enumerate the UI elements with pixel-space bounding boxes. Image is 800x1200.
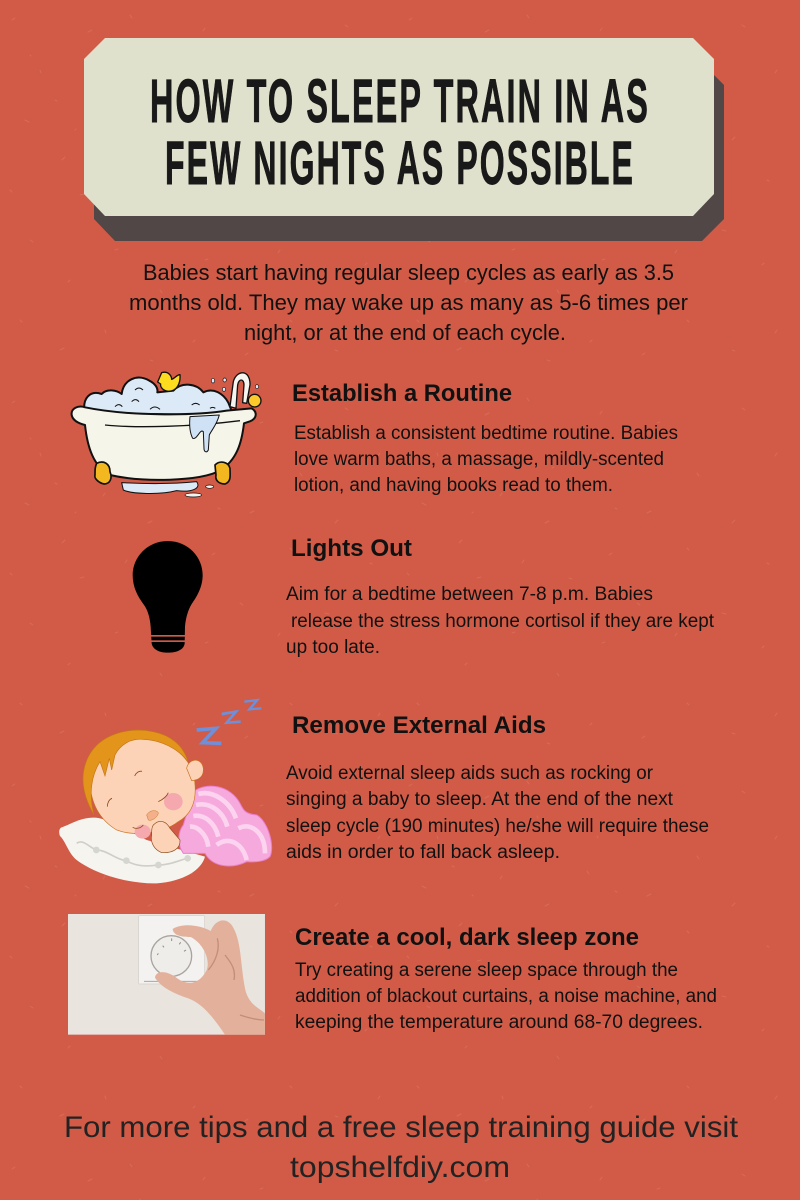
body in pajamas bbox=[179, 786, 272, 866]
body text: love warm baths, a massage, mildly-scented bbox=[294, 449, 664, 470]
head bbox=[90, 739, 195, 833]
body text: Try creating a serene sleep space through the bbox=[295, 960, 678, 981]
body text: up too late. bbox=[286, 637, 380, 658]
body text bbox=[295, 960, 717, 1033]
section: remove external aids bbox=[286, 712, 709, 863]
banner shadow bbox=[94, 70, 724, 241]
body text: Avoid external sleep aids such as rocking or bbox=[286, 763, 654, 784]
hair bbox=[83, 730, 188, 815]
footer call to action: For more tips and a free sleep training guide visit bbox=[64, 1111, 739, 1144]
intro text: months old. They may wake up as many as 5-6 times per bbox=[129, 290, 688, 315]
body text: aids in order to fall back asleep. bbox=[286, 842, 560, 863]
section: lights out bbox=[286, 535, 715, 658]
photo: thermostat and hand bbox=[68, 914, 265, 1035]
hand bbox=[155, 920, 265, 1035]
heading: Remove External Aids bbox=[292, 712, 546, 739]
body text: sleep cycle (190 minutes) he/she will require these bbox=[286, 816, 709, 837]
heading: Create a cool, dark sleep zone bbox=[295, 924, 639, 951]
footer call to action bbox=[64, 1111, 739, 1184]
body text: Establish a consistent bedtime routine. Babies bbox=[294, 423, 678, 444]
body text: release the stress hormone cortisol if they are kept bbox=[291, 611, 715, 632]
intro text: Babies start having regular sleep cycles as early as 3.5 bbox=[143, 260, 674, 285]
icon: light bulb bbox=[133, 541, 203, 653]
icon: bathtub bbox=[72, 372, 261, 497]
section: create a cool, dark sleep zone bbox=[295, 924, 717, 1033]
title banner bbox=[84, 38, 724, 241]
intro text bbox=[129, 260, 688, 345]
pillow bbox=[59, 818, 205, 883]
body text: addition of blackout curtains, a noise machine, and bbox=[295, 986, 717, 1007]
body text: singing a baby to sleep. At the end of the next bbox=[286, 789, 674, 810]
icon: sleeping baby bbox=[59, 700, 272, 883]
title text bbox=[150, 67, 650, 197]
thermostat bbox=[139, 916, 205, 984]
cheeks and face bbox=[164, 793, 183, 810]
body text bbox=[286, 584, 715, 658]
heading: Lights Out bbox=[291, 535, 412, 562]
body text: keeping the temperature around 68-70 degrees. bbox=[295, 1012, 703, 1033]
section: establish a routine bbox=[292, 380, 678, 496]
banner plate bbox=[84, 38, 714, 216]
body text bbox=[294, 423, 678, 496]
body text: Aim for a bedtime between 7-8 p.m. Babies bbox=[286, 584, 653, 605]
body text: lotion, and having books read to them. bbox=[294, 475, 613, 496]
hand bbox=[151, 821, 180, 853]
intro text: night, or at the end of each cycle. bbox=[244, 320, 566, 345]
footer call to action: topshelfdiy.com bbox=[290, 1151, 510, 1184]
ear bbox=[187, 760, 203, 781]
zzz bbox=[197, 700, 261, 743]
body text bbox=[286, 763, 709, 863]
heading: Establish a Routine bbox=[292, 380, 512, 407]
